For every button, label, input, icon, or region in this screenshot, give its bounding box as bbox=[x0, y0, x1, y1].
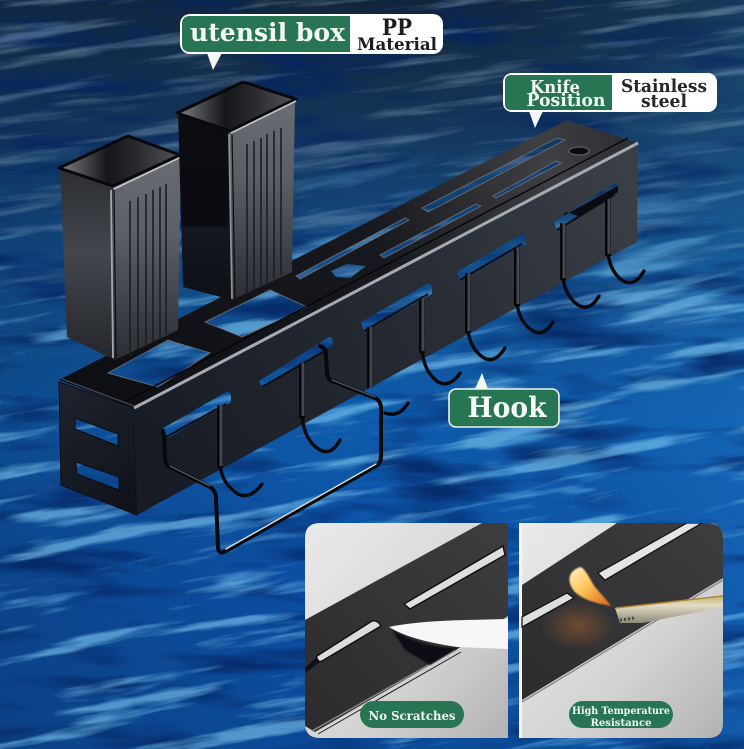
box 1 corner edge bbox=[111, 190, 113, 358]
box 2 opening bbox=[177, 82, 296, 131]
hook strips shadow bbox=[220, 199, 608, 468]
callout: utensil box bbox=[180, 14, 443, 70]
panel: high temperature resistance bbox=[519, 523, 723, 738]
towel bar bbox=[163, 346, 381, 552]
pointer bbox=[475, 373, 488, 389]
badge bbox=[569, 701, 673, 728]
screw hole bbox=[569, 147, 589, 155]
box 2 corner edge bbox=[229, 134, 232, 299]
callout: knife position: Position bbox=[526, 90, 606, 111]
rack body bbox=[59, 120, 638, 515]
scorch glow bbox=[546, 605, 609, 647]
callout: knife position: Stainless bbox=[621, 76, 707, 97]
window bars bbox=[166, 195, 614, 437]
badge text: High Temperature bbox=[572, 706, 670, 717]
utensil box 2 bbox=[177, 82, 296, 300]
metal band bbox=[305, 523, 508, 732]
box 1 opening bbox=[59, 136, 180, 186]
metal band bbox=[522, 523, 723, 700]
slot rims bbox=[108, 138, 565, 387]
label plate bbox=[449, 389, 559, 427]
box 1 right face bbox=[113, 154, 181, 360]
callout: knife position bbox=[503, 73, 717, 128]
slots bbox=[404, 546, 505, 609]
callout: knife position: steel bbox=[641, 91, 687, 112]
panel background bbox=[305, 523, 508, 738]
badge bbox=[360, 701, 464, 728]
callout: hook bbox=[449, 373, 559, 427]
knife blade bbox=[389, 619, 508, 649]
knife shadow bbox=[392, 630, 458, 665]
pointer bbox=[529, 111, 543, 128]
dark patch behind far window bbox=[563, 186, 618, 216]
label text: Hook bbox=[468, 391, 547, 424]
panel: no scratches bbox=[305, 523, 508, 738]
panel: high temperature resistance: Resistance bbox=[590, 718, 652, 729]
rack highlighted edge bbox=[134, 143, 638, 408]
rack long face with hook windows bbox=[134, 143, 638, 515]
hook curves bbox=[220, 253, 644, 496]
label text: Knife bbox=[530, 77, 580, 98]
callout: utensil box: PP bbox=[382, 15, 412, 41]
matchstick bbox=[615, 596, 723, 623]
box 2 ribs bbox=[247, 128, 281, 294]
label plate bbox=[503, 73, 717, 112]
box 1 left face bbox=[60, 166, 115, 360]
panel background bbox=[519, 523, 723, 738]
slots bbox=[598, 523, 702, 580]
box 1 ribs bbox=[130, 184, 166, 356]
hooks bbox=[166, 195, 644, 496]
pointer bbox=[207, 53, 222, 70]
rack end face bbox=[59, 382, 137, 515]
hook strips face bbox=[221, 199, 609, 466]
rack top surface with slots bbox=[59, 120, 638, 408]
box 2 left face bbox=[178, 112, 232, 300]
label text: utensil box bbox=[190, 18, 346, 47]
utensil box 1 bbox=[59, 136, 181, 360]
callout: utensil box: Material bbox=[357, 35, 438, 55]
badge text: No Scratches bbox=[368, 709, 456, 723]
flame bbox=[569, 567, 611, 606]
box 2 right face bbox=[229, 99, 295, 300]
label plate bbox=[180, 14, 443, 54]
